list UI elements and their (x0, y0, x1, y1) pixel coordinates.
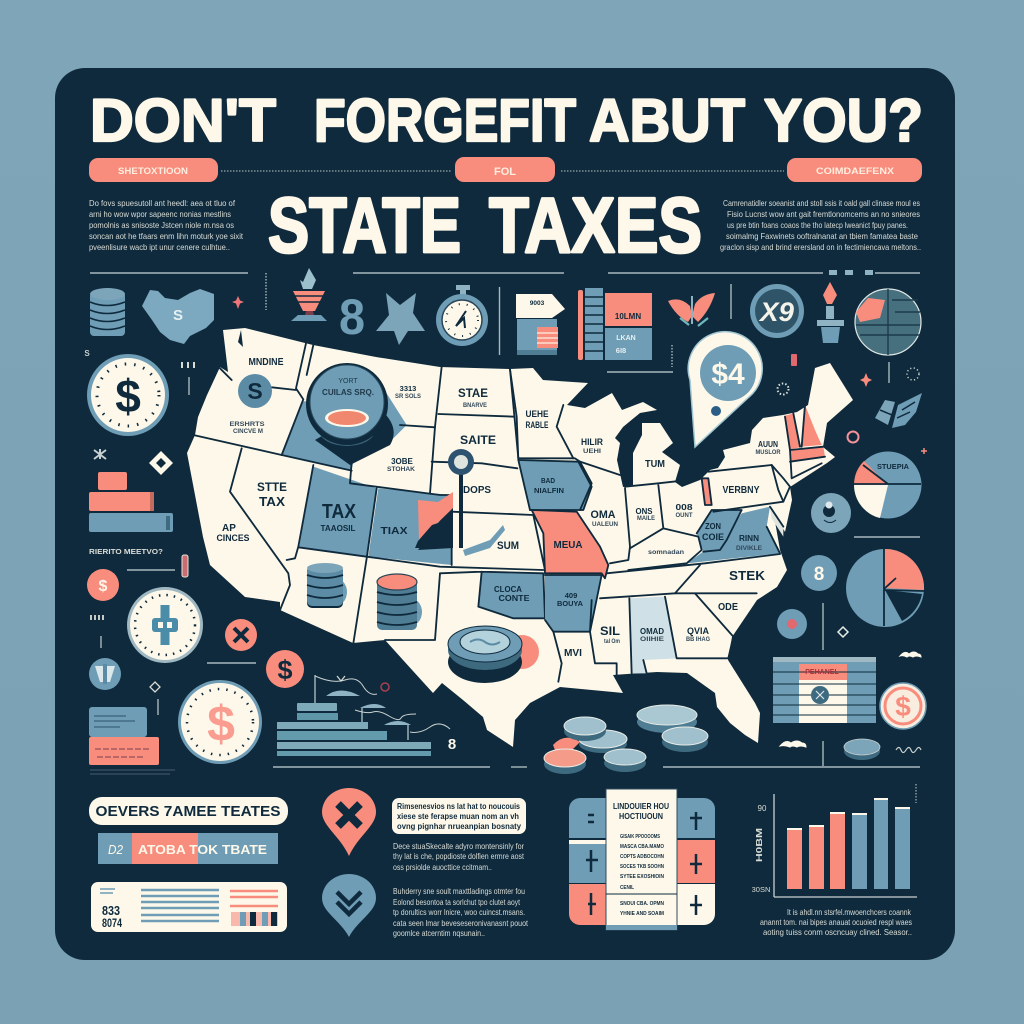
map coin: large labelled coin: YORT (338, 378, 358, 385)
map label: northwest: SR SOLS (395, 394, 421, 400)
icon: small tag (791, 354, 797, 366)
icon: clock with cross (127, 587, 203, 663)
map label: northwest: STOHAK (387, 467, 416, 473)
heading: state taxes: TAXES (489, 181, 702, 269)
icon: squiggle (896, 748, 921, 752)
text block: left intro: Do fovs spuesutoll ant heedl: aea ot tluo of (89, 198, 236, 208)
panel: cream data card (91, 882, 287, 932)
map label: east: VERBNY (722, 484, 760, 496)
panel: tabbed list card: CENIL (620, 885, 635, 891)
text block: chart caption: aoting tuiss conm oscncuay clined. Seasor.. (763, 927, 912, 937)
text block: bottom first: thy lat is che, popdioste dolfien ermre aost (393, 851, 524, 861)
icon: small sparkle (860, 373, 872, 387)
icon: blue 8 coin: 8 (814, 564, 824, 585)
map label: east: STEK (729, 568, 766, 583)
icon: dotted ring centre (778, 384, 788, 394)
map label: plains: BOUYA (557, 599, 584, 608)
map label: east: OMA (590, 509, 616, 521)
Puget sound notch (238, 330, 243, 347)
icon: blue state shape: S (173, 307, 183, 324)
map label: plains: UEHE (526, 409, 548, 420)
icon: diamond (149, 451, 173, 475)
panel: tabbed list card: SOCES TKB SOOHN (620, 864, 664, 870)
panel: tabbed list card (569, 789, 715, 930)
text block: right intro: us pre btin foans coaos the tho latecp lweanict fpuy panes. (727, 220, 908, 230)
text block: right intro: graclon sisp and brind erersland on in fectimiencava meltons.. (720, 242, 921, 252)
map label: plains (458, 388, 584, 659)
map label: plains: BNARVE (463, 403, 487, 409)
panel: tabbed list card: SYTEE EXOSHIOIN (620, 874, 664, 880)
icon: plus (232, 296, 244, 309)
icon: wave right (900, 652, 921, 657)
map coin: flat stack with coral halo (448, 626, 539, 683)
map label: east: 008 (676, 502, 693, 512)
label: left caption: RIERITO MEETVO? (89, 547, 163, 556)
map label: northwest: 3313 (400, 384, 416, 393)
icon: ticks lower (91, 615, 103, 620)
icon: diamond small (838, 627, 848, 637)
icon: stopwatch (436, 285, 488, 346)
map label: plains: MVI (564, 648, 582, 659)
map label: east: AUUN (758, 439, 778, 449)
map label: plains: DOPS (463, 484, 491, 496)
eastern states, fills and borders (510, 369, 825, 682)
left label: S mark: S (84, 349, 90, 358)
text block: bottom second: Buhderry sne soult maxttladings otmter fou (393, 886, 525, 896)
title: DON'T (90, 87, 276, 154)
map label: east: UEHI (583, 449, 601, 455)
panel: cream note: Rimsenesvios ns lat hat to noucouis (397, 802, 520, 811)
pill row (89, 157, 922, 182)
chart: pie lower (846, 549, 924, 627)
icon: numbered badge (750, 284, 804, 338)
title: ABUT (589, 87, 745, 154)
map label: northwest: TAX (259, 495, 286, 509)
text block: right intro: soimalmg Faxwinets ooftralnanat an tbiem famatea baste (726, 231, 918, 241)
map label: east: BB IHAG (686, 637, 710, 643)
panel: tabbed list card: YHNIE AND SOAIM (620, 911, 664, 917)
map label: east (581, 437, 781, 645)
map label: plains: SUM (497, 540, 519, 552)
panel: tabbed list card: GISAIK PPOOOOMS (620, 834, 660, 840)
map label: east: UALEUN (592, 522, 618, 528)
icon: clock with dollar (87, 354, 169, 436)
text block: right intro (720, 198, 921, 252)
map label: east: ONS (636, 506, 653, 516)
map label: plains: CONTE (498, 594, 530, 603)
text block: bottom second: Eolond besontoa ta sorlchut tpo clutet aoyt (393, 897, 520, 907)
pill row: COIMDAEFENX (816, 166, 895, 177)
icon: clock with coral dollar (178, 680, 262, 764)
map label: east: QVIA (687, 626, 709, 636)
icon: dotted ring top right (907, 368, 919, 380)
icon: clock with coral dollar: $ (207, 696, 235, 752)
chart: pie top (854, 452, 922, 518)
text block: chart caption: It is ahdl.nn stsrfel.mwoenchcers coannk (787, 907, 912, 917)
title: FORGEFIT (314, 87, 576, 154)
icon: blue coin left (89, 658, 121, 690)
map label: east: COIE (702, 532, 724, 542)
icon: coral dollar coin: $ (99, 578, 108, 595)
icon: wing (875, 393, 922, 428)
text block: bottom first (393, 841, 524, 872)
icon: coral dollar badge (266, 650, 304, 688)
title (90, 87, 923, 154)
icon: blue 8 coin (801, 555, 837, 591)
icon: blue state shape (142, 289, 214, 344)
icon: stacked blocks (89, 472, 173, 532)
map coin stack: blue (307, 563, 347, 608)
map coin: large labelled coin: CUILAS SRQ. (322, 388, 374, 397)
icon: blue and coral cards (89, 707, 175, 774)
map label: east: TUM (645, 459, 665, 470)
icon: coral dollar medal (880, 683, 926, 729)
icon: candle (817, 282, 844, 343)
icon: coin stack (90, 288, 125, 336)
icon: table card: PEHANEL (805, 669, 839, 676)
pill row: SHETOXTIOON (118, 166, 188, 177)
text block: bottom first: Dece stuaSkecalte adyro montensinly for (393, 841, 524, 851)
text block: bottom second: goomlce atcerntim nqsunain.. (393, 928, 485, 938)
map label: east: OMAD (640, 626, 664, 636)
panel: cream note (392, 798, 526, 834)
icon: document: 9003 (530, 300, 545, 307)
icon: vase (291, 268, 327, 321)
chart: bottom bar chart (752, 784, 917, 897)
icon: globe (855, 289, 921, 355)
text block: left intro: arni ho wow wpor sapeenc nonias mestlins (89, 209, 231, 219)
map label: plains: BAD (541, 476, 556, 485)
label: eight: 8 (448, 736, 456, 753)
map label: east: DIVIKLE (736, 546, 762, 552)
map coin stack: coral top (377, 574, 422, 630)
panel: cream title pill (89, 797, 288, 825)
icon: scattered coins (544, 705, 708, 774)
pill row: FOL (494, 166, 516, 178)
chart: bottom bar chart: H0BM (755, 828, 764, 862)
icon: book with panels: LKAN (616, 335, 636, 342)
icon: blue check pin (322, 874, 376, 937)
panel: tabbed list card: COPTS ADBOCOHN (620, 854, 664, 860)
icon: butterfly (668, 293, 715, 326)
map label: northwest: STTE (257, 482, 287, 494)
heading: state taxes: STATE (268, 181, 461, 269)
map label: east: MAILE (637, 516, 655, 522)
chart: bottom bar chart: 90 (758, 804, 767, 813)
panel: tabbed list card: LINDOUIER HOU (613, 801, 669, 811)
panel: tabbed list card: HOCTIUOUN (619, 811, 663, 821)
panel: cream data card: 8074 (102, 916, 122, 930)
text block: left intro: pveenlisure wacb ipt unur cenere culhtue.. (89, 242, 230, 252)
text block: left intro: soncan aot he tfaars enm lihn moturk yoe sixit (89, 231, 244, 241)
map pin with flag (415, 449, 505, 556)
map label: east: RINN (739, 534, 759, 543)
icon: coral ring (848, 432, 858, 442)
map label: northwest: 3OBE (391, 457, 414, 466)
panel: blue and coral strip (98, 833, 278, 864)
map label: east: HILIR (581, 437, 603, 447)
icon: wave lower (780, 741, 806, 747)
icon: coral dollar badge: $ (277, 655, 293, 685)
text block: right intro: Camrenatidler soeanist and stoll ssis it oald gall clinase moul es (723, 198, 920, 208)
panel: cream note: ovng pignhar nrueanpian bosnaty (397, 822, 522, 831)
map label: east: OUNT (676, 513, 693, 519)
map label: northwest: TAX (322, 501, 357, 523)
map label: east: somnadan (648, 550, 684, 556)
map label: east: MUSLOR (756, 450, 781, 456)
map label: plains: CLOCA (494, 585, 522, 594)
map coin: small S coin (238, 374, 272, 408)
text block: bottom second: tp dorultics worr lnicre, woo cuincst.msans. (393, 907, 525, 917)
map label: plains: 409 (565, 591, 577, 600)
chart: stepped bars (277, 675, 450, 756)
map label: east: OIIHIE (640, 637, 664, 643)
text block: chart caption: anannt tom. nai bipes anauat ocuoied respl waes (760, 917, 912, 927)
panel: blue and coral strip: D2 (108, 842, 124, 857)
icon: book with panels: 10LMN (615, 312, 641, 321)
icon: clock with dollar: $ (115, 370, 141, 422)
map label: east: ZON (705, 522, 721, 531)
map label: plains: MEUA (554, 539, 583, 551)
map coin: small S coin: S (247, 378, 263, 404)
icon: small tube (182, 555, 188, 577)
text block: bottom second: cata seen lmar beveseseronivanasnt pouot (393, 918, 528, 928)
map outline (187, 328, 853, 747)
icon: outlined diamond (150, 682, 160, 692)
panel: tabbed list card: SNOUI CBA. OPMN (620, 901, 664, 907)
text block: bottom second (393, 886, 528, 938)
icon: table card (773, 657, 876, 723)
map label: northwest: CINCVE M (233, 429, 263, 435)
chart: bottom bar chart: 30SN (752, 885, 770, 894)
map label: east: SIL (600, 626, 620, 638)
map label: northwest: TIAX (380, 526, 408, 537)
chart: pie top: STUEPIA (877, 464, 909, 471)
map label: plains: NIALFIN (534, 486, 564, 495)
panel: cream data card: 833 (102, 903, 120, 918)
text block: right intro: Fisio Lucnst wow ant gait fremtlonomcems an no snieores (727, 209, 920, 219)
map label: plains: STAE (458, 388, 488, 400)
icon: flat coin (844, 739, 880, 760)
text block: bottom first: oss prsiolde auocttice ccitmam.. (393, 862, 492, 872)
icon: coral plus (921, 448, 927, 454)
icon: star (376, 293, 425, 345)
title: YOU? (764, 87, 923, 154)
map: United States (187, 328, 853, 747)
heading: state taxes (268, 181, 702, 269)
icon: asterisk (94, 449, 106, 459)
text block: left intro (89, 198, 244, 252)
icon: coral X coin (225, 619, 257, 651)
icon: coin with coral dot (777, 609, 807, 639)
panel: cream title pill: OEVERS 7AMEE TEATES (96, 804, 281, 820)
map label: plains: SAITE (460, 435, 496, 447)
dividers (90, 270, 920, 767)
map label: east: tal Om (604, 639, 620, 645)
panel: tabbed list card: MASCA CBA.MAMO (620, 844, 665, 850)
map label: northwest: MNDINE (248, 357, 284, 368)
map coin: large labelled coin (306, 363, 394, 465)
map label: plains: RABLE (526, 420, 548, 431)
map label: east: ODE (718, 602, 738, 613)
icon: book with panels: 6I8 (616, 346, 626, 355)
panel: cream note: xiese ste ferapse muan nom an vh (397, 812, 519, 821)
map label: northwest: AP (222, 523, 236, 534)
icon: coral X pin (322, 788, 376, 856)
icon: blue face coin (811, 493, 851, 533)
text block: chart caption (760, 907, 912, 937)
map label: northwest: ERSHRTS (230, 422, 264, 428)
icon: dollar location pin: $4 (711, 358, 745, 391)
text block: left intro: pomolnis as snisoste Jstcen niole m.nsa os (89, 220, 234, 230)
western states, fills and borders (193, 343, 592, 643)
icon: numbered badge: X9 (758, 297, 794, 327)
map label: northwest (216, 357, 421, 544)
icon: document (516, 294, 565, 355)
map label: northwest: TAAOSIL (320, 524, 356, 533)
icon: coral dollar medal: $ (895, 691, 911, 722)
icon: dollar location pin (688, 332, 762, 447)
panel: main dark card (55, 68, 955, 960)
icon: small ticks (182, 362, 194, 368)
icon: book with panels (578, 288, 652, 360)
panel: blue and coral strip: ATOBA TOK TBATE (138, 842, 267, 857)
icon: number eight: 8 (339, 289, 365, 345)
map label: northwest: CINCES (216, 533, 250, 544)
icon: coral dollar coin (87, 569, 119, 601)
